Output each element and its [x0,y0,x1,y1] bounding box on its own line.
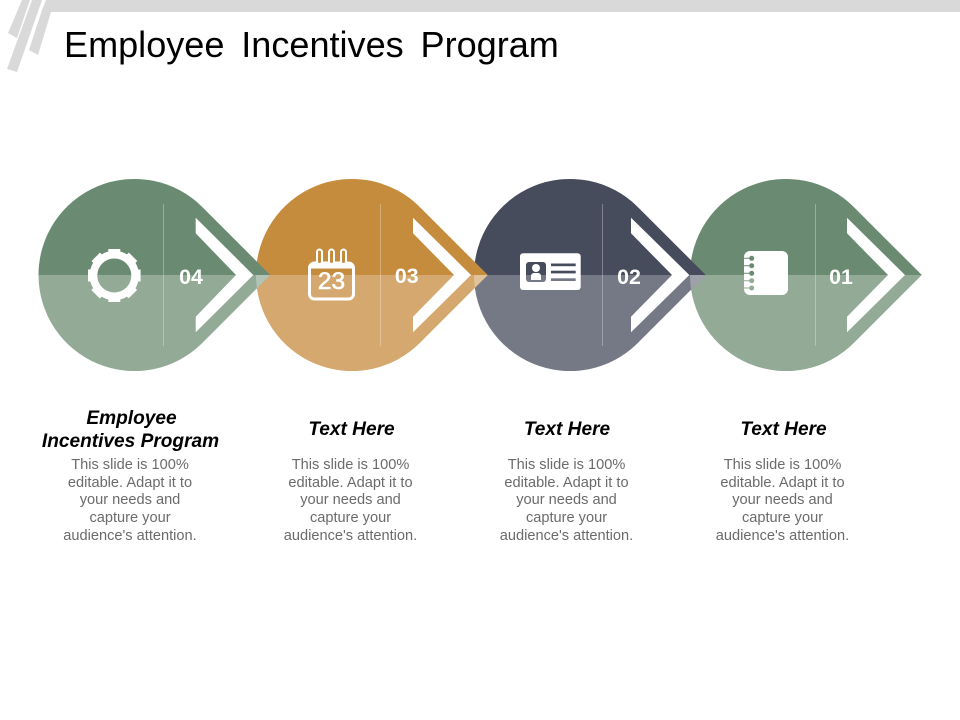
column 02 text: editable. Adapt it to [504,475,629,491]
decorative header band [7,0,960,72]
step 04 chevron [196,218,253,332]
step 04 number: 04 [179,265,203,289]
column 01 text: editable. Adapt it to [720,475,845,491]
column 01 text: audience's attention. [716,528,849,544]
icon: calendar [310,250,354,299]
column 04 text: capture your [89,510,171,526]
column 04 text: audience's attention. [63,528,197,544]
column 04 text: Employee [86,408,177,429]
column 02 text: your needs and [516,492,617,508]
column 03 text: This slide is 100% [292,457,409,473]
column 03 text: your needs and [300,492,401,508]
column 02 text [500,419,633,544]
column 02 text: This slide is 100% [508,457,625,473]
column 03 text: audience's attention. [284,528,417,544]
icon: ID card [520,253,581,290]
step 01 chevron [847,218,905,332]
step 04 teardrop [38,179,270,371]
step 03 number: 03 [395,264,419,288]
icon: calendar: 23 [318,268,345,295]
column 01 text: This slide is 100% [724,457,841,473]
step 03 chevron [413,218,471,332]
column 03 text: editable. Adapt it to [288,475,413,491]
title: Employee Incentives Program [64,24,559,65]
column 03 text: Text Here [308,419,395,440]
column 01 text: Text Here [740,419,827,440]
icon: notebook [744,251,788,295]
column 04 text: Incentives Program [42,431,219,452]
step 01 teardrop [690,179,922,371]
column 01 text: capture your [742,510,823,526]
step 02 chevron [631,218,689,332]
column 04 text: editable. Adapt it to [68,475,192,491]
step 02 number: 02 [617,265,641,289]
step 02 teardrop [474,179,706,371]
column 03 text: capture your [310,510,391,526]
step 01 number: 01 [829,265,853,289]
column 04 text: This slide is 100% [71,457,189,473]
step 03 teardrop [256,179,488,371]
column 01 text [716,419,849,544]
column 02 text: Text Here [524,419,611,440]
column 04 text [42,408,219,544]
icon: gear [88,249,141,302]
column 02 text: capture your [526,510,607,526]
column 01 text: your needs and [732,492,833,508]
column 04 text: your needs and [80,492,180,508]
column 03 text [284,419,417,544]
column 02 text: audience's attention. [500,528,633,544]
